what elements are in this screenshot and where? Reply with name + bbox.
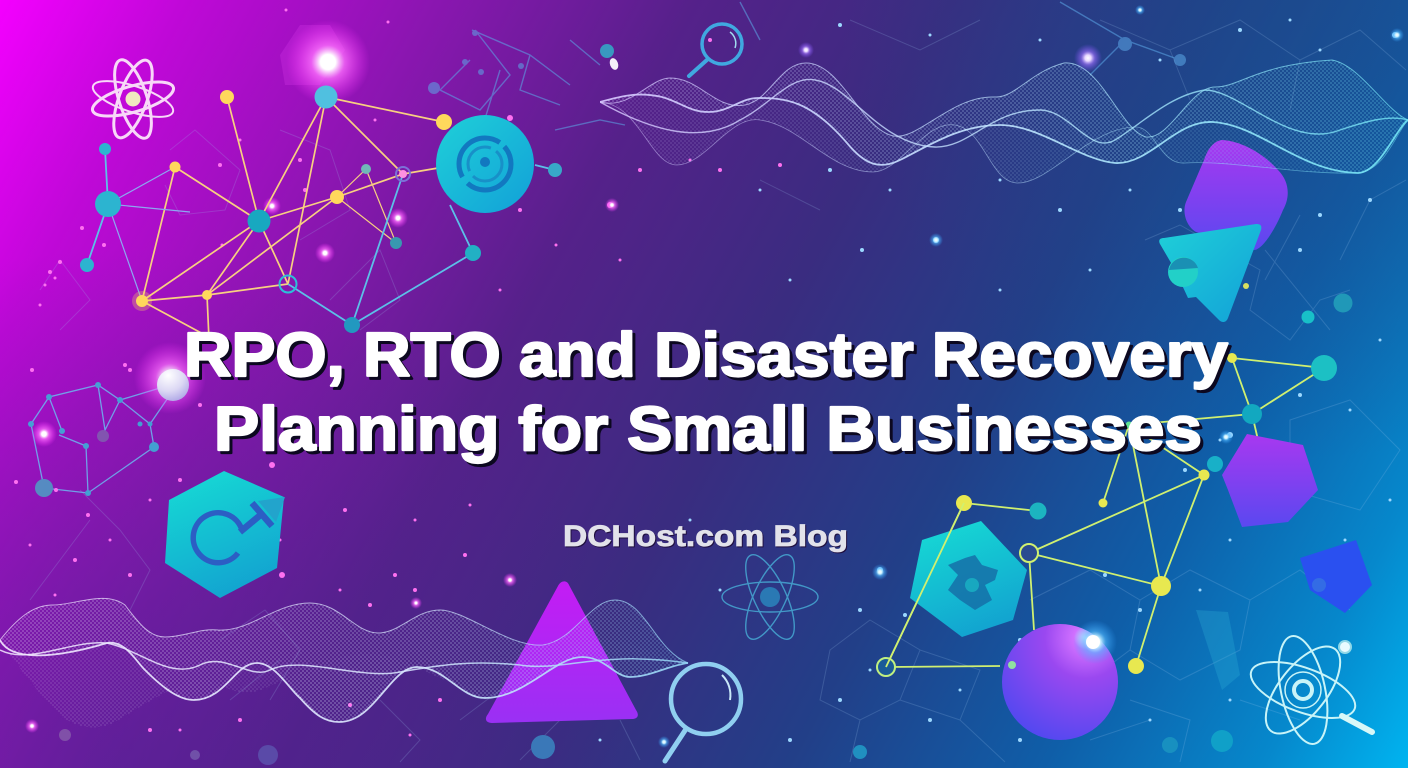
icon: magnifier top	[689, 24, 742, 76]
shape: purple triangle	[486, 581, 638, 723]
nodes	[80, 86, 562, 333]
small white blob near magnifier	[600, 44, 620, 71]
network: top left constellation	[80, 86, 562, 340]
data wave bottom	[0, 598, 688, 728]
main glow top	[280, 20, 370, 104]
icon: atom with magnifier bottom right	[1244, 632, 1372, 748]
shape: teal hexagon with male symbol	[165, 471, 285, 598]
shape: teal hexagon with gear	[886, 503, 1027, 667]
starfield particles blue	[538, 18, 1398, 742]
shape: violet hexagon	[1222, 434, 1318, 527]
yellow links	[142, 97, 485, 340]
icon: atom top left	[89, 56, 177, 142]
title line 2: Planning for Small Businesses	[214, 395, 1202, 464]
shape: teal paper-plane triangle	[1159, 224, 1261, 322]
title	[184, 321, 1229, 464]
blue links	[87, 149, 555, 325]
icon: magnifier bottom	[665, 664, 741, 761]
subtitle: DCHost.com Blog	[563, 520, 848, 553]
left-lower network	[28, 382, 172, 497]
sphere glow left	[134, 342, 206, 414]
shape: blue pentagon	[1300, 540, 1372, 613]
network: right constellation	[877, 283, 1352, 676]
bottom nodes	[59, 661, 1233, 765]
icon: teal target disc	[436, 115, 534, 213]
data wave top	[600, 55, 1408, 190]
faint translucent shard	[1196, 610, 1240, 690]
icon: faint atom bottom centre	[722, 549, 818, 645]
title line 1: RPO, RTO and Disaster Recovery	[184, 321, 1229, 390]
network behind title top	[428, 2, 1186, 135]
starfield particles pink	[14, 8, 782, 736]
shape: purple rounded polygon	[1184, 140, 1288, 250]
shape: violet sphere	[1002, 620, 1118, 740]
small glow left	[31, 421, 57, 447]
